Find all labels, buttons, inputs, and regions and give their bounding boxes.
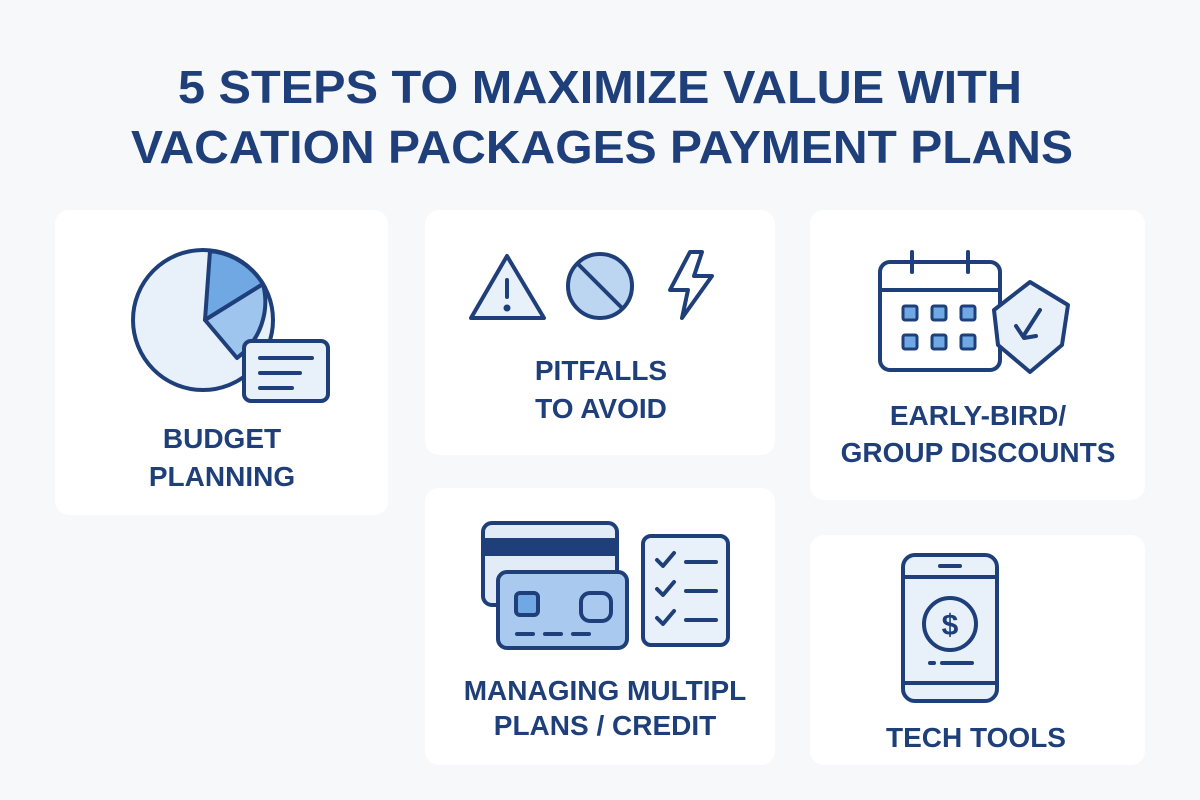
text: early-bird: GROUP DISCOUNTS: [841, 437, 1115, 468]
panel: managing plans: [425, 488, 775, 765]
panel: budget planning: [55, 210, 388, 515]
text: early-bird: [841, 400, 1115, 468]
icon: no sign: [568, 254, 632, 318]
title: VACATION PACKAGES PAYMENT PLANS: [131, 121, 1073, 173]
text: managing plans: [464, 675, 746, 741]
panel: tech tools: [810, 535, 1145, 765]
icon: checklist: [643, 536, 728, 645]
text: pitfalls: PITFALLS: [535, 355, 667, 386]
panel: pitfalls: [425, 210, 775, 455]
icon: phone: [903, 555, 997, 701]
icon: pie chart: [133, 250, 328, 401]
text: pitfalls: TO AVOID: [535, 393, 667, 424]
text: early-bird: EARLY-BIRD/: [890, 400, 1066, 431]
text: budget planning: PLANNING: [149, 461, 295, 492]
text: budget planning: [149, 423, 295, 492]
text: managing plans: MANAGING MULTIPL: [464, 675, 746, 706]
text: pitfalls: [535, 355, 667, 424]
panel: tech tools: $: [942, 609, 959, 642]
icon: lightning: [670, 252, 712, 318]
text: managing plans: PLANS / CREDIT: [494, 710, 716, 741]
icon: shield badge: [994, 282, 1068, 372]
panel: early-bird: [810, 210, 1145, 500]
text: tech tools: TECH TOOLS: [886, 722, 1066, 753]
icon: warning: [471, 256, 544, 318]
title: 5 STEPS TO MAXIMIZE VALUE WITH: [178, 61, 1022, 113]
text: budget planning: BUDGET: [163, 423, 281, 454]
icon: calendar: [880, 252, 1000, 370]
title: [131, 61, 1073, 173]
icon: credit cards: [483, 523, 627, 648]
